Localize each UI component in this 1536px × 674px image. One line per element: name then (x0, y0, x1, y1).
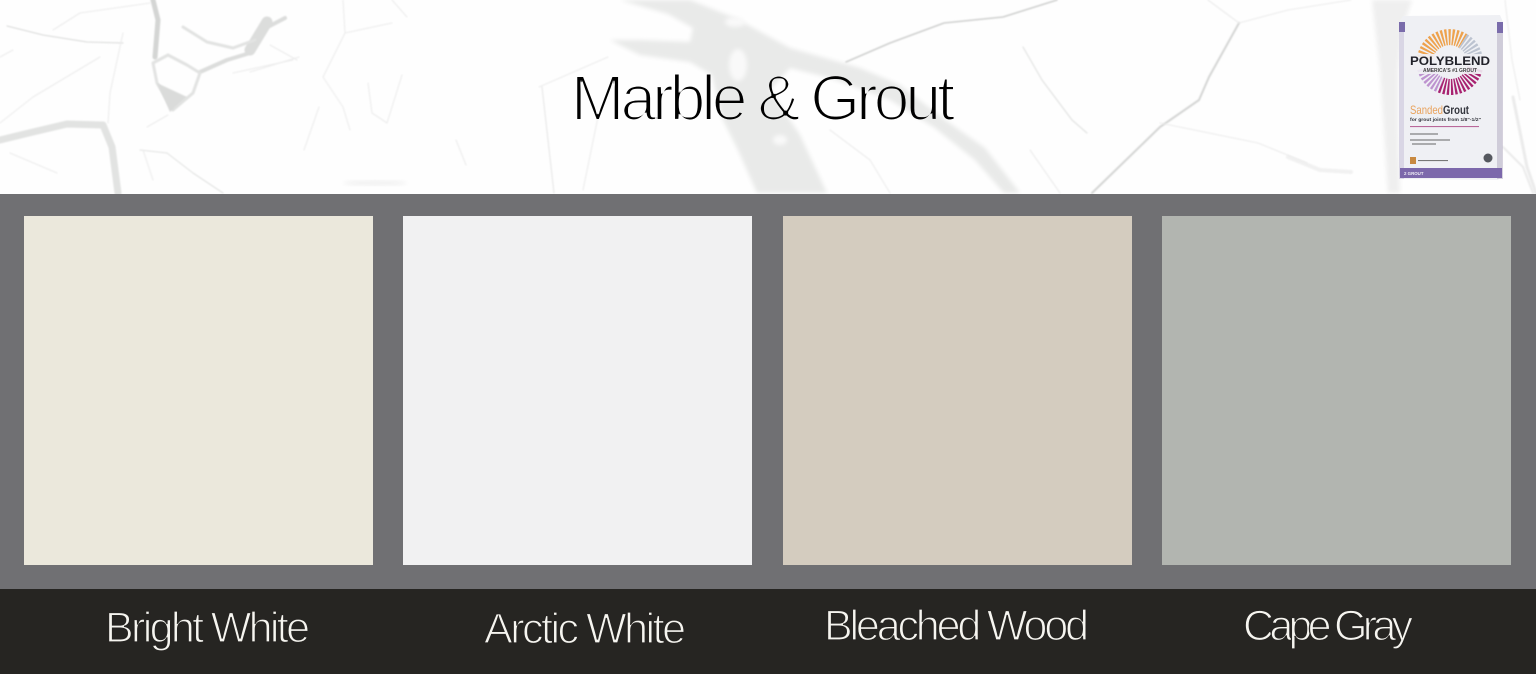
swatch: Cape Gray (1162, 216, 1511, 565)
logo text strip (1406, 54, 1496, 74)
purple base band (1400, 168, 1502, 178)
marble header background (0, 0, 1536, 194)
swatch: Arctic White (403, 216, 752, 565)
small print (1410, 126, 1479, 144)
label: Bright White: Bright White (105, 604, 310, 652)
label: Bleached Wood: Bleached Wood (824, 602, 1089, 650)
tagline: AMERICA'S #1 GROUT (1423, 68, 1477, 74)
label: Cape Gray: Cape Gray (1243, 602, 1414, 650)
medium marble veins (0, 0, 1536, 193)
footer text: 2 GROUT (1404, 171, 1424, 176)
swatch: Bright White (24, 216, 373, 565)
icon: Polyblend sanded grout bag (1399, 15, 1503, 180)
white spots inside central band (725, 17, 787, 145)
product name: Sanded (1410, 103, 1443, 117)
panel: gray swatch background (0, 194, 1536, 589)
certification badges (1410, 154, 1492, 164)
joint size note: for grout joints from 1/8"-1/2" (1410, 117, 1481, 122)
panel: dark label bar (0, 589, 1536, 674)
icon: Polyblend sanded grout bag: Grout (1443, 103, 1469, 117)
swatch: Bleached Wood (783, 216, 1132, 565)
title: Marble & Grout (571, 62, 955, 134)
broad pale veins (610, 0, 1412, 193)
wedge of grey in left vein ring (157, 83, 187, 112)
sunburst logo (1425, 37, 1475, 87)
faint patch (343, 180, 407, 186)
fine marble veins (0, 0, 1520, 193)
label: Arctic White: Arctic White (484, 605, 686, 653)
brand name: POLYBLEND (1410, 54, 1490, 68)
